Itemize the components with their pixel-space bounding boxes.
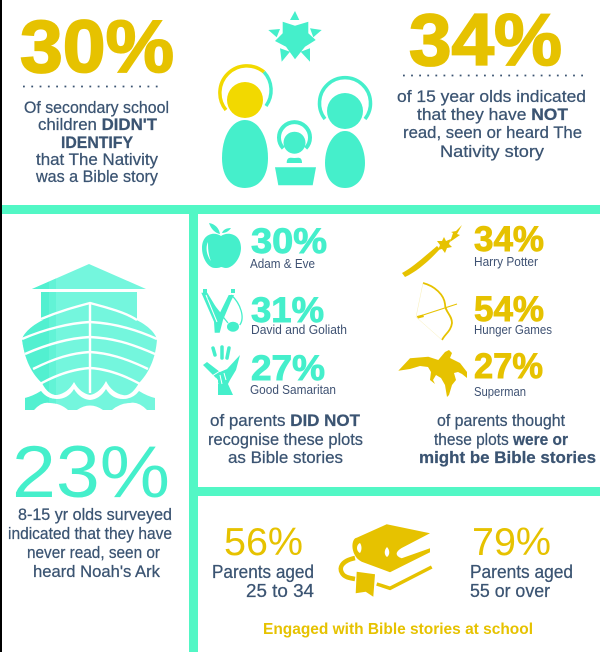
text: 8-15 yr olds: never read, seen or (27, 544, 160, 562)
figure: Mary (220, 66, 271, 188)
icon: nativity family with star (220, 11, 370, 188)
stat: 79% parents 55 or over: 55 or over (470, 581, 550, 601)
icon: books (341, 524, 432, 597)
caption: engaged with Bible stories: Engaged with Bible stories at school (263, 621, 533, 638)
text: did not recognise: as Bible stories (228, 449, 343, 467)
text: 15 year olds: Nativity story (440, 143, 545, 161)
stat: 34%: 34% (409, 0, 562, 81)
text: secondary school children (24, 99, 169, 186)
icon: Superman (398, 350, 467, 397)
panel: engaged at school (212, 521, 573, 638)
stat: David and Goliath: David and Goliath (251, 323, 347, 337)
text: thought were Bible stories: might be Bible stories (419, 449, 596, 467)
panel: Bible plots not recognised (201, 222, 363, 467)
stat: Adam and Eve: 30% (251, 222, 327, 261)
panel dividers (2, 205, 600, 652)
text: 8-15 yr olds: heard Noah's Ark (33, 563, 161, 581)
stat: Harry Potter: Harry Potter (474, 255, 538, 269)
text: thought were Bible stories: of parents thought (437, 412, 565, 430)
text: secondary school children: Of secondary school (24, 99, 169, 117)
stat: Superman: Superman (474, 385, 526, 399)
figure: baby in manger (275, 122, 316, 185)
stat: 79% parents 55 or over: 79% (472, 521, 551, 564)
stat: David and Goliath: 31% (251, 291, 324, 330)
text: 15 year olds: that they have NOT (417, 106, 568, 124)
text: 8-15 yr olds: 8-15 yr olds surveyed (18, 506, 172, 524)
panel: Noah's Ark (8, 260, 172, 581)
figure: Joseph (320, 78, 370, 188)
text: secondary school children: IDENTIFY (61, 134, 133, 152)
icon: wand (402, 225, 462, 277)
stat: 23%: 23% (12, 432, 170, 513)
stat: 79% parents 55 or over (470, 521, 573, 601)
text: 15 year olds: of 15 year olds indicated (397, 88, 586, 106)
text: did not recognise (208, 412, 363, 467)
stat: Hunger Games: Hunger Games (474, 323, 552, 337)
text: thought were Bible stories: these plots were or (434, 431, 569, 449)
text: did not recognise: recognise these plots (208, 431, 363, 449)
stat: Harry Potter: 34% (474, 220, 544, 259)
stat: 56% parents 25 to 34: Parents aged (212, 562, 314, 582)
icon: star (268, 11, 322, 62)
stat: 56% parents 25 to 34: 25 to 34 (246, 581, 314, 601)
icon: ark (20, 260, 160, 415)
stat: Adam and Eve: Adam & Eve (250, 257, 315, 271)
text: 8-15 yr olds (8, 506, 172, 581)
stat: Good Samaritan: 27% (251, 349, 325, 388)
stat: 56% parents 25 to 34: 56% (224, 521, 303, 564)
stat: Superman: 27% (474, 347, 543, 386)
text: 8-15 yr olds: indicated that they have (8, 525, 172, 543)
icon: bow and arrow (416, 283, 457, 340)
text: 15 year olds (397, 88, 586, 161)
text: secondary school children: was a Bible story (35, 168, 159, 186)
stat: 79% parents 55 or over: Parents aged (470, 562, 573, 582)
icon: slingshot (201, 289, 242, 333)
stat: Hunger Games: 54% (474, 290, 544, 329)
text: 15 year olds: read, seen or heard The (403, 124, 582, 142)
text: thought were Bible stories (419, 412, 596, 467)
panel: 34% nativity statistic (397, 0, 587, 161)
panel: 30% nativity statistic (20, 5, 174, 186)
text: did not recognise: of parents DID NOT (210, 412, 360, 430)
icon: helping hand (203, 347, 240, 395)
stat: Good Samaritan (250, 349, 336, 397)
stat: Good Samaritan: Good Samaritan (250, 383, 336, 397)
panel: fictional plots thought biblical (398, 220, 596, 467)
stat: David and Goliath (251, 291, 347, 337)
stat: 56% parents 25 to 34 (212, 521, 314, 601)
stat: 30%: 30% (20, 5, 174, 88)
text: secondary school children: children DIDN'T (38, 116, 157, 134)
text: secondary school children: that The Nativity (36, 151, 159, 169)
icon: apple (202, 223, 241, 268)
